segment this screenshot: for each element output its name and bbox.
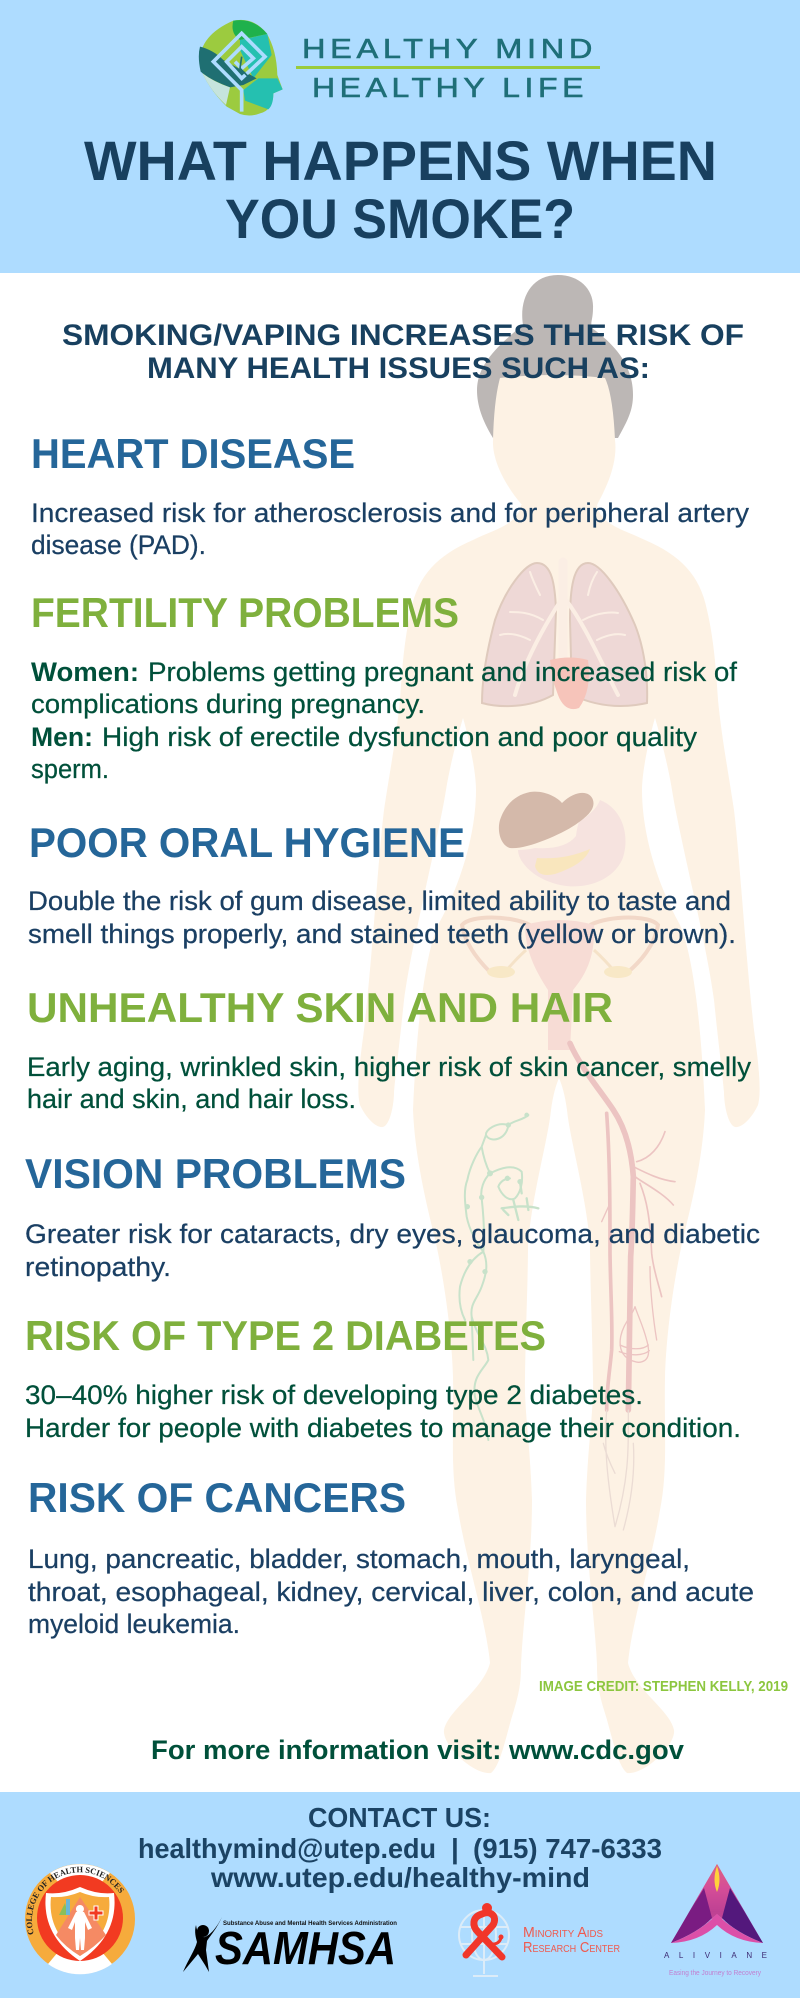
contact details: | [451,1833,459,1864]
red ribbon [466,1903,504,1957]
logo text: healthy life: HEALTHY LIFE [312,72,588,103]
liver [499,792,594,848]
section: poor oral hygiene [28,819,736,949]
logo: healthy mind healthy life [199,20,600,116]
text block: myeloid leukemia. [28,1609,240,1639]
text block: Greater risk for cataracts, dry eyes, glaucoma, and diabetic [25,1219,760,1249]
icon: head with spiral [199,20,283,116]
panel: footer band [0,1792,800,1998]
title: YOU SMOKE? [225,187,575,250]
text block [27,1052,752,1114]
hair [477,275,633,438]
text block: disease (PAD). [31,530,206,560]
body silhouette [358,375,760,1773]
text block: smell things properly, and stained teeth (yellow or brown). [28,919,736,949]
logo: college of health sciences seal [25,1864,135,1974]
reproductive organs [462,918,658,1050]
text block: Problems getting pregnant and increased risk of [148,657,738,687]
text block [31,498,750,560]
contact details: healthymind@utep.edu [138,1833,436,1864]
text block: 30–40% higher risk of developing type 2 diabetes. [25,1380,643,1410]
text block [25,1380,741,1443]
contact details: CONTACT US: [308,1802,491,1833]
section: risk of cancers [28,1474,754,1639]
logo: minority aids research center [459,1903,620,1976]
text block: complications during pregnancy. [31,689,425,719]
center name: Minority Aids [523,1925,603,1941]
text block: High risk of erectile dysfunction and poor quality [102,722,698,752]
heading: RISK OF CANCERS [28,1474,406,1521]
illustration: female body anatomy [358,275,760,1773]
section: unhealthy skin and hair [27,984,752,1114]
lymphatic vessels [459,1113,538,1440]
text block: hair and skin, and hair loss. [27,1084,356,1114]
heading: UNHEALTHY SKIN AND HAIR [27,984,613,1031]
tagline: Easing the Journey to Recovery [669,1970,761,1977]
text block: throat, esophageal, kidney, cervical, liver, colon, and acute [28,1577,754,1607]
text block: Harder for people with diabetes to manage their condition. [25,1413,741,1443]
samhsa wordmark: SAMHSA [215,1922,396,1974]
text block: Double the risk of gum disease, limited ability to taste and [28,886,731,916]
text block: Women: [31,657,139,687]
text block [28,1544,754,1639]
title [84,129,717,250]
wordmark: ALIVIANE [664,1951,767,1960]
subheading: MANY HEALTH ISSUES SUCH AS: [147,352,650,385]
contact details: www.utep.edu/healthy-mind [210,1862,590,1893]
text block: Increased risk for atherosclerosis and for peripheral artery [31,498,750,528]
heading: POOR ORAL HYGIENE [29,819,465,866]
subheading: SMOKING/VAPING INCREASES THE RISK OF [62,319,744,352]
text block: sperm. [31,754,109,784]
heading: RISK OF TYPE 2 DIABETES [25,1312,546,1359]
contact details [138,1802,662,1893]
subheading [62,319,744,385]
logo: aliviane [664,1864,767,1977]
arteries [570,1043,675,1530]
samhsa figure [183,1917,222,1972]
text block [25,1219,760,1282]
logo: samhsa [183,1917,397,1974]
text block: Early aging, wrinkled skin, higher risk of skin cancer, smelly [27,1052,752,1082]
panel: header band [0,0,800,273]
text block: Men: [31,722,93,752]
heart [550,658,589,709]
section: fertility problems [31,589,738,784]
globe [459,1910,509,1976]
logo text: healthy mind: HEALTHY MIND [302,33,597,64]
more information link: For more information visit: www.cdc.gov [151,1735,684,1765]
triangle mark [671,1864,763,1943]
text block: Lung, pancreatic, bladder, stomach, mouth, laryngeal, [28,1544,690,1574]
stomach hollow [535,808,586,848]
text block: retinopathy. [25,1252,171,1282]
stomach [518,800,626,886]
contact details: (915) 747-6333 [473,1833,662,1864]
section: heart disease [31,430,750,560]
heading: VISION PROBLEMS [25,1150,406,1197]
logo divider [296,66,600,69]
heading: HEART DISEASE [31,430,355,477]
samhsa agency line: Substance Abuse and Mental Health Services Administration [223,1920,397,1927]
text block [28,886,736,949]
text block [31,657,738,784]
section: risk of type 2 diabetes [25,1312,741,1443]
seal lettering: COLLEGE OF HEALTH SCIENCES [26,1866,124,1934]
lungs [482,562,647,706]
title: WHAT HAPPENS WHEN [84,129,717,192]
heading: FERTILITY PROBLEMS [31,589,459,636]
pancreas [535,849,590,875]
section: vision problems [25,1150,760,1282]
logo: minority aids research center: Research Center [523,1940,620,1956]
